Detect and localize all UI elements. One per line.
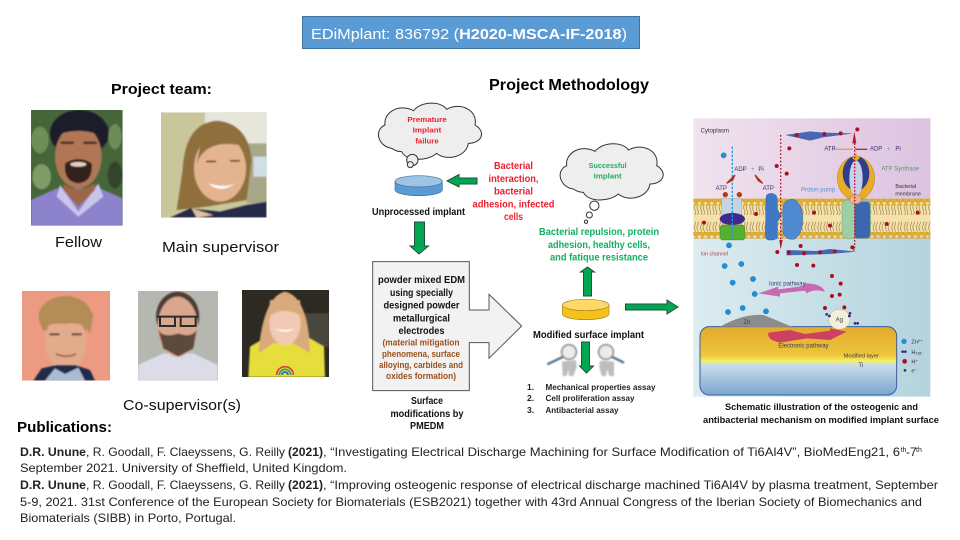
ion channel xyxy=(720,147,745,240)
label: fellow: Fellow xyxy=(55,234,102,251)
process block arrow: phenomena, surface xyxy=(382,349,460,359)
publication one: (2021) xyxy=(288,445,323,459)
schematic labels: Bacterial xyxy=(895,184,916,190)
publication one: th xyxy=(900,447,906,454)
process block arrow: metallurgical xyxy=(393,314,450,324)
ionic pathway arrow xyxy=(758,283,825,297)
header: project id banner xyxy=(302,16,640,48)
text: bacterial repulsion: and fatique resistance xyxy=(550,252,648,264)
schematic labels: Ag xyxy=(836,318,843,324)
schematic labels: ADP xyxy=(870,147,882,153)
cytoplasm background xyxy=(693,118,930,238)
photo: co-supervisor two xyxy=(138,291,218,381)
schematic labels: Electronic pathway xyxy=(778,344,829,350)
text: bacterial interaction: cells xyxy=(504,212,523,223)
photo: fellow xyxy=(31,110,123,226)
publication one: , R. Goodall, F. Claeyssens, G. Reilly xyxy=(86,445,285,459)
caption: schematic illustration xyxy=(703,402,939,426)
schematic labels: Proton pump xyxy=(801,187,836,193)
header: project id banner: EDiMplant: 836792 ( H2020-MSCA-IF-2018 ) xyxy=(311,26,627,43)
schematic labels: Cytoplasm xyxy=(701,128,729,134)
schematic labels: + xyxy=(887,147,891,153)
list: assays: Mechanical properties assay xyxy=(546,382,656,392)
schematic labels: ADP xyxy=(734,167,747,173)
list: assays xyxy=(527,382,656,415)
text: bacterial repulsion: Bacterial repulsion, protein xyxy=(539,227,659,238)
schematic labels: ATP xyxy=(716,186,727,192)
schematic legend: H⁺ xyxy=(911,358,918,365)
heading: publications: Publications: xyxy=(17,419,112,436)
icon: figure with magnifier right xyxy=(599,345,624,376)
text: bacterial interaction: adhesion, infected xyxy=(472,200,554,210)
list: assays: 3. xyxy=(527,405,534,415)
process block arrow: using specially xyxy=(390,288,453,299)
schematic labels: Zn xyxy=(743,320,750,326)
schematic labels: Modified layer xyxy=(844,354,879,360)
icon: figure with magnifier left xyxy=(547,345,577,376)
list: assays: Cell proliferation assay xyxy=(546,393,635,403)
process block arrow xyxy=(373,262,522,391)
label: modified surface implant: Modified surface implant xyxy=(533,330,645,341)
text: bacterial interaction: Bacterial xyxy=(494,161,533,172)
process block arrow: designed powder xyxy=(384,300,460,312)
cylinder: modified surface implant xyxy=(562,299,609,320)
schematic labels: Ion channel xyxy=(701,251,728,257)
cloud: successful implant: Implant xyxy=(594,172,622,181)
schematic legend: e⁻ xyxy=(911,368,917,374)
extracellular background xyxy=(693,238,930,397)
text: bacterial interaction: interaction, xyxy=(488,174,539,185)
list: assays: 1. xyxy=(527,382,534,392)
arrow: bacteria towards implant xyxy=(447,174,477,187)
label: surface modifications by PMEDM xyxy=(390,396,464,432)
schematic labels: ATP xyxy=(763,186,774,192)
label: unprocessed implant: Unprocessed implant xyxy=(372,207,466,218)
proton flow arrows xyxy=(727,131,867,255)
atp synthase xyxy=(837,137,875,250)
publication two: , “Improving osteogenic response of electrical discharge machined Ti6Al4V by plasma treatment, September xyxy=(323,478,938,492)
cloud: premature implant failure xyxy=(378,103,482,168)
arrow: to process box xyxy=(410,222,428,254)
list: assays: Antibacterial assay xyxy=(546,405,619,415)
cloud: premature implant failure: Premature xyxy=(407,115,447,124)
text: bacterial repulsion xyxy=(539,227,659,264)
publication one: , “Investigating Electrical Discharge Machining for Surface Modification of Ti6Al4V”, BioMedEng21, 6 xyxy=(323,445,900,459)
process block arrow: powder mixed EDM xyxy=(378,275,465,286)
publication one: th xyxy=(916,447,922,454)
publication two: , R. Goodall, F. Claeyssens, G. Reilly xyxy=(86,478,285,492)
cloud: premature implant failure: Implant xyxy=(413,126,442,135)
heading: project team: Project team: xyxy=(111,81,212,98)
schematic labels: Ti xyxy=(858,363,863,369)
cloud: premature implant failure: failure xyxy=(415,136,439,145)
schematic labels xyxy=(701,128,921,369)
cloud: successful implant: Successful xyxy=(589,161,627,170)
label: surface modifications by PMEDM: modifications by xyxy=(390,409,464,420)
cloud: successful implant xyxy=(560,144,663,223)
label: main supervisor: Main supervisor xyxy=(162,239,279,256)
photo: co-supervisor three xyxy=(242,290,329,377)
schematic legend: H₂ₐₓ xyxy=(911,350,922,356)
publication one: September 2021. University of Sheffield, United Kingdom. xyxy=(20,461,347,475)
process block arrow: (material mitigation xyxy=(382,338,460,348)
heading: project methodology: Project Methodology xyxy=(489,77,649,94)
schematic labels: + xyxy=(751,167,755,173)
publication one: -7 xyxy=(906,445,917,459)
publication one: D.R. Unune xyxy=(20,445,86,459)
process block arrow: alloying, carbides and xyxy=(379,360,463,370)
publication one xyxy=(20,445,922,475)
schematic labels: ATP xyxy=(824,147,836,153)
schematic labels: Pi xyxy=(895,147,901,153)
cylinder: unprocessed implant xyxy=(395,176,442,196)
publication two: (2021) xyxy=(288,478,323,492)
publication two: Biomaterials (SIBB) in Porto, Portugal. xyxy=(20,511,236,525)
publication two: D.R. Unune xyxy=(20,478,86,492)
label: co-supervisors: Co-supervisor(s) xyxy=(123,397,241,414)
photo: co-supervisor one xyxy=(22,291,110,381)
publication two xyxy=(20,478,938,525)
photo: main supervisor xyxy=(161,112,267,218)
caption: schematic illustration: Schematic illustration of the osteogenic and xyxy=(725,402,918,413)
label: surface modifications by PMEDM: PMEDM xyxy=(410,421,444,432)
publication two: 5-9, 2021. 31st Conference of the European Society for Biomaterials (ESB2021) together with 43rd Annual Congress of the Iberian Society of Biomechanics and xyxy=(20,495,922,509)
text: bacterial interaction: bacterial xyxy=(494,186,533,198)
arrow: down to assays xyxy=(580,342,594,373)
zinc ions xyxy=(721,153,769,315)
schematic labels: Ionic pathway xyxy=(769,282,806,288)
bacterial membrane xyxy=(693,199,930,239)
arrow: up to outcome xyxy=(580,267,594,296)
implant surface xyxy=(700,309,897,395)
schematic labels: ATP Synthase xyxy=(881,167,920,173)
caption: schematic illustration: antibacterial mechanism on modified implant surface xyxy=(703,415,939,426)
text: bacterial interaction xyxy=(472,161,554,223)
schematic legend xyxy=(901,339,923,374)
schematic labels: membrane xyxy=(895,192,921,198)
proton pump xyxy=(765,135,803,249)
schematic labels: Pi xyxy=(758,167,764,173)
text: bacterial repulsion: adhesion, healthy cells, xyxy=(548,240,650,251)
label: surface modifications by PMEDM: Surface xyxy=(411,396,443,407)
process block arrow: oxides formation) xyxy=(386,371,456,381)
protons xyxy=(702,127,920,310)
schematic: osteogenic and antibacterial mechanism xyxy=(693,118,930,397)
arrow: to schematic xyxy=(626,300,678,314)
schematic legend: Zn²⁺ xyxy=(911,339,923,346)
process block arrow: electrodes xyxy=(398,326,445,337)
list: assays: 2. xyxy=(527,393,534,403)
